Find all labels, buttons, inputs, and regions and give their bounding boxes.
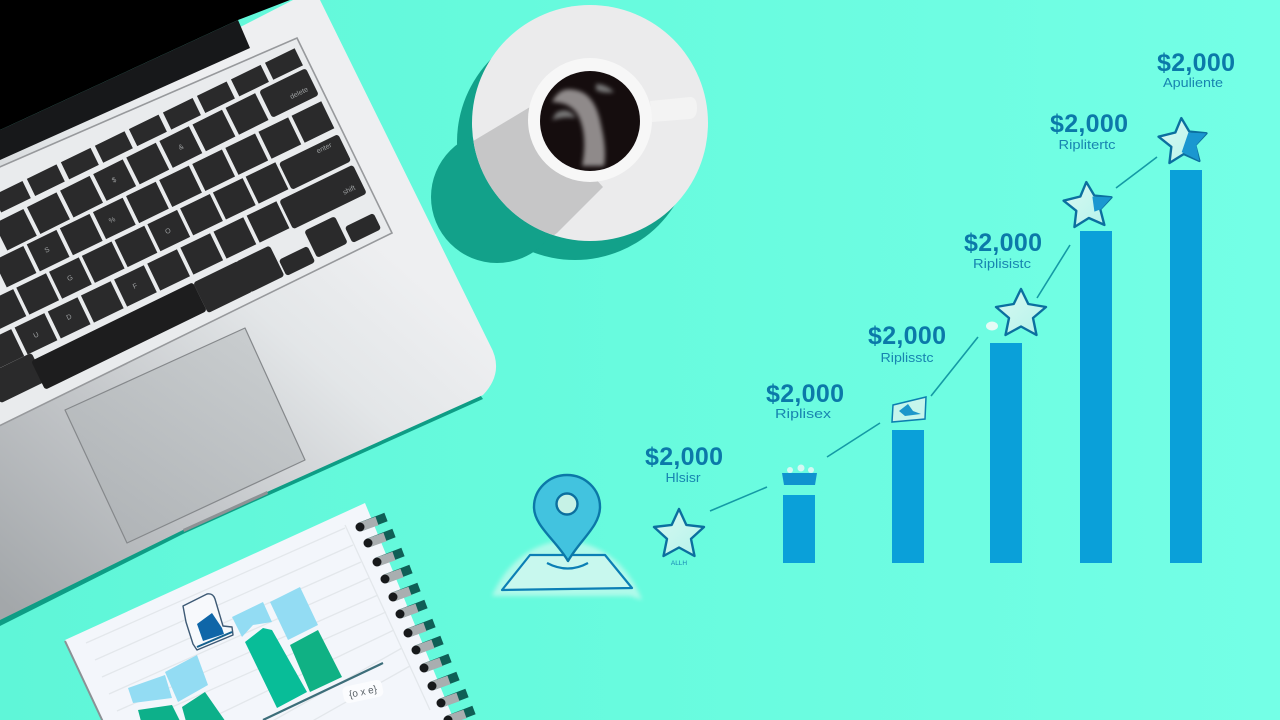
cup handle — [650, 97, 697, 122]
milestone 4 star — [996, 289, 1046, 335]
arrow and modifier keys — [0, 213, 381, 403]
coil holes — [360, 527, 448, 720]
map glow — [492, 540, 642, 600]
milestone 5 star — [1062, 180, 1113, 228]
location pin on map — [492, 475, 642, 600]
milestone 3 label: $2,000 — [868, 322, 946, 350]
connector 1 — [710, 487, 767, 511]
connector 5 — [1116, 157, 1157, 188]
function key row — [0, 57, 299, 204]
key legends: F — [132, 283, 139, 291]
paper left edge shadow — [65, 641, 104, 720]
paper ruling — [86, 525, 430, 720]
milestone 5 label: $2,000 — [1050, 110, 1128, 138]
bar 4 — [1080, 231, 1112, 563]
milestone 1 star — [654, 509, 704, 567]
milestone 2 label — [766, 380, 844, 421]
paper — [65, 503, 456, 720]
number key row — [0, 107, 262, 237]
key legends: O — [164, 227, 173, 236]
hinge — [0, 20, 250, 160]
tub icon — [782, 464, 817, 485]
laptop — [0, 0, 496, 626]
cast shadows — [431, 24, 693, 263]
notebook bar chart — [128, 587, 342, 720]
delete key — [259, 68, 319, 118]
milestone 3 label — [868, 322, 946, 365]
coffee — [540, 71, 640, 171]
map plane — [502, 555, 632, 590]
middle letter row — [0, 176, 282, 317]
key legends: % — [108, 216, 117, 225]
front notch — [183, 491, 268, 532]
shift key — [279, 165, 367, 229]
milestone 4 label: $2,000 — [964, 229, 1042, 257]
screen — [0, 0, 290, 130]
keyboard keys — [0, 57, 381, 403]
coil highlights — [360, 521, 465, 720]
notebook — [65, 503, 474, 720]
spiral binding — [360, 517, 474, 720]
notebook chart axis — [263, 663, 383, 720]
milestone 6 label: $2,000 — [1157, 49, 1235, 77]
key legends: S — [44, 246, 51, 255]
growth chart — [492, 49, 1235, 600]
cup rim — [528, 58, 652, 182]
notebook axis label: {o x e} — [348, 684, 379, 701]
saucer — [472, 5, 708, 241]
spacebar — [31, 282, 207, 390]
laptop drop shadow — [0, 380, 483, 626]
box icon — [892, 397, 926, 422]
milestone 4 label — [964, 229, 1042, 271]
white smudge — [986, 322, 998, 330]
coffee cup on saucer — [431, 5, 708, 263]
key legends: shift — [342, 185, 357, 197]
key legends: enter — [316, 142, 334, 155]
connector 2 — [827, 423, 880, 457]
bar 2 — [892, 430, 924, 563]
milestone 2 label: Riplisex — [775, 406, 832, 421]
green bar bottoms — [138, 628, 342, 720]
bar 1 — [783, 495, 815, 563]
key legends: G — [66, 274, 74, 283]
upper letter row — [0, 115, 328, 274]
milestone 6 label: Apuliente — [1163, 75, 1223, 90]
pin centre — [556, 494, 578, 514]
map arc — [547, 563, 588, 568]
coil tips — [360, 517, 474, 720]
milestone 6 star — [1157, 116, 1208, 164]
milestone 1 star: ALLH — [671, 560, 687, 567]
milestone 1 label: $2,000 — [645, 443, 723, 471]
key legends — [33, 86, 357, 340]
milestone 2 label: $2,000 — [766, 380, 844, 408]
laptop body — [0, 0, 496, 620]
key legends: U — [33, 331, 40, 340]
milestone 5 label: Riplitertc — [1058, 137, 1116, 152]
milestone 5 label — [1050, 110, 1128, 152]
milestone 3 label: Riplisstc — [880, 350, 934, 365]
connector 3 — [931, 337, 978, 396]
notebook axis label — [342, 679, 384, 704]
milestone 1 label — [645, 443, 723, 485]
pin body — [534, 475, 600, 561]
coffee reflection — [552, 84, 614, 166]
enter key — [279, 134, 351, 190]
blue bar tops — [128, 587, 318, 703]
milestone 6 label — [1157, 49, 1235, 90]
trackpad — [65, 328, 305, 543]
milestone 1 label: Hlsisr — [666, 470, 701, 485]
key legends: delete — [289, 86, 310, 101]
shadow on saucer — [474, 108, 603, 236]
milestone 4 label: Riplisistc — [973, 256, 1032, 271]
bar 5 — [1170, 170, 1202, 563]
keyboard well — [0, 38, 392, 428]
key legends: D — [66, 313, 73, 322]
bar 3 — [990, 343, 1022, 563]
lower letter row — [0, 215, 283, 357]
connector 4 — [1037, 245, 1070, 298]
key legends: $ — [111, 177, 118, 185]
notebook jar icon — [183, 594, 233, 650]
key legends: & — [178, 143, 185, 152]
